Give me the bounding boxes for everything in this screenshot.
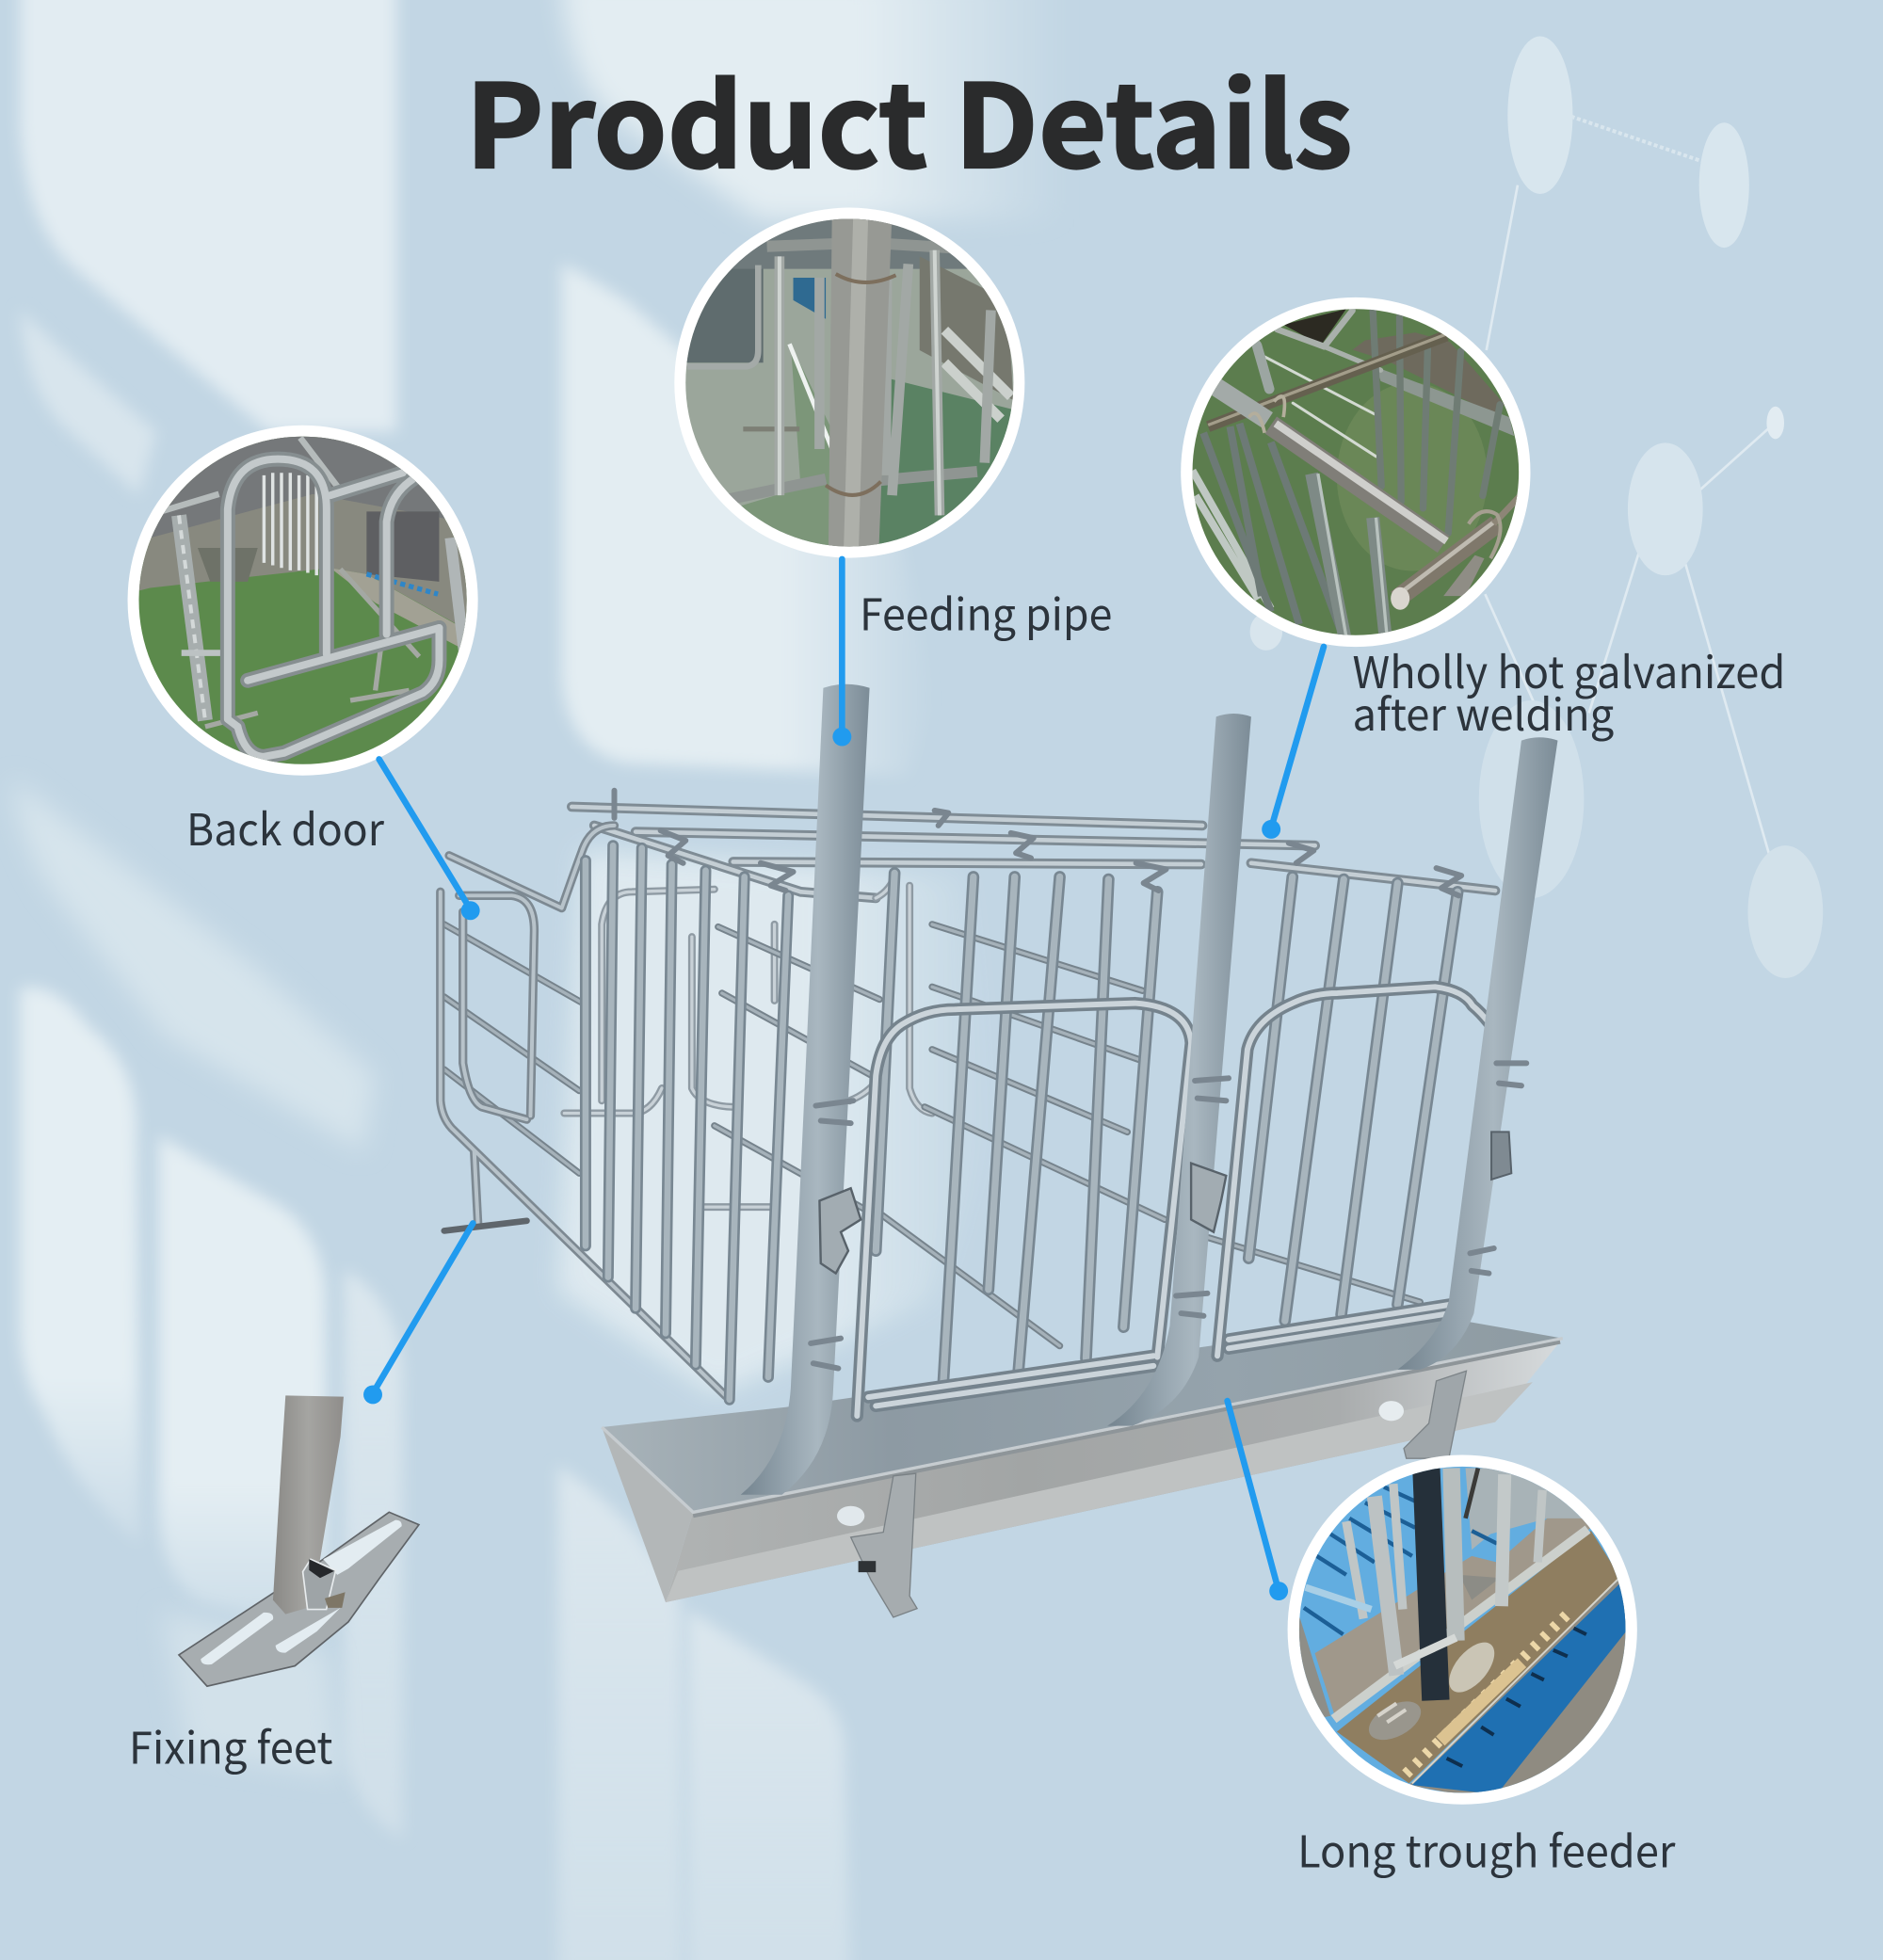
left post — [741, 684, 870, 1495]
label: Long trough feeder — [1297, 1818, 1676, 1881]
trough brackets — [837, 1371, 1466, 1617]
foot plate — [444, 1221, 526, 1230]
label: Wholly hot galvanized — [1353, 638, 1785, 701]
photo: foot plate — [179, 1395, 419, 1686]
label: after welding — [1353, 681, 1614, 744]
side panel bars — [586, 845, 788, 1400]
label — [1353, 638, 1785, 744]
label: Back door — [186, 795, 385, 859]
photo: long trough — [1288, 1455, 1637, 1805]
photo: galvanized joint — [1181, 297, 1530, 647]
diagonal rails — [444, 924, 1420, 1346]
inner door arcs — [564, 873, 932, 1207]
front panel bars — [876, 873, 1457, 1381]
label: Feeding pipe — [860, 581, 1112, 644]
label: Fixing feet — [129, 1713, 332, 1776]
callout: wholly hot galvanized — [1181, 297, 1785, 839]
feed trough — [602, 1314, 1563, 1602]
back door frame — [441, 826, 726, 1396]
leader line and dot — [1228, 1401, 1279, 1591]
door frame 2 — [1217, 987, 1503, 1356]
callout: back door — [125, 426, 482, 920]
photo: feeding pipe — [674, 208, 1026, 563]
door frame 1 — [857, 1004, 1191, 1416]
upper rails — [571, 807, 1495, 898]
photo: back door — [125, 426, 482, 781]
leader line and dot — [840, 559, 845, 738]
leader line and dot — [1271, 647, 1324, 828]
title: Product Details — [465, 35, 1353, 201]
right post — [1397, 737, 1557, 1370]
leader line and dot — [379, 759, 471, 909]
middle post — [1107, 714, 1251, 1426]
callout: feeding pipe — [674, 208, 1112, 747]
pipe clamps — [614, 791, 1526, 1369]
main product: gestation stall with feed trough — [441, 684, 1563, 1617]
decorative molecule graphics — [1250, 37, 1823, 978]
callout: long trough feeder — [1228, 1401, 1676, 1881]
callout: fixing feet — [129, 1223, 473, 1776]
leader line and dot — [373, 1223, 473, 1393]
